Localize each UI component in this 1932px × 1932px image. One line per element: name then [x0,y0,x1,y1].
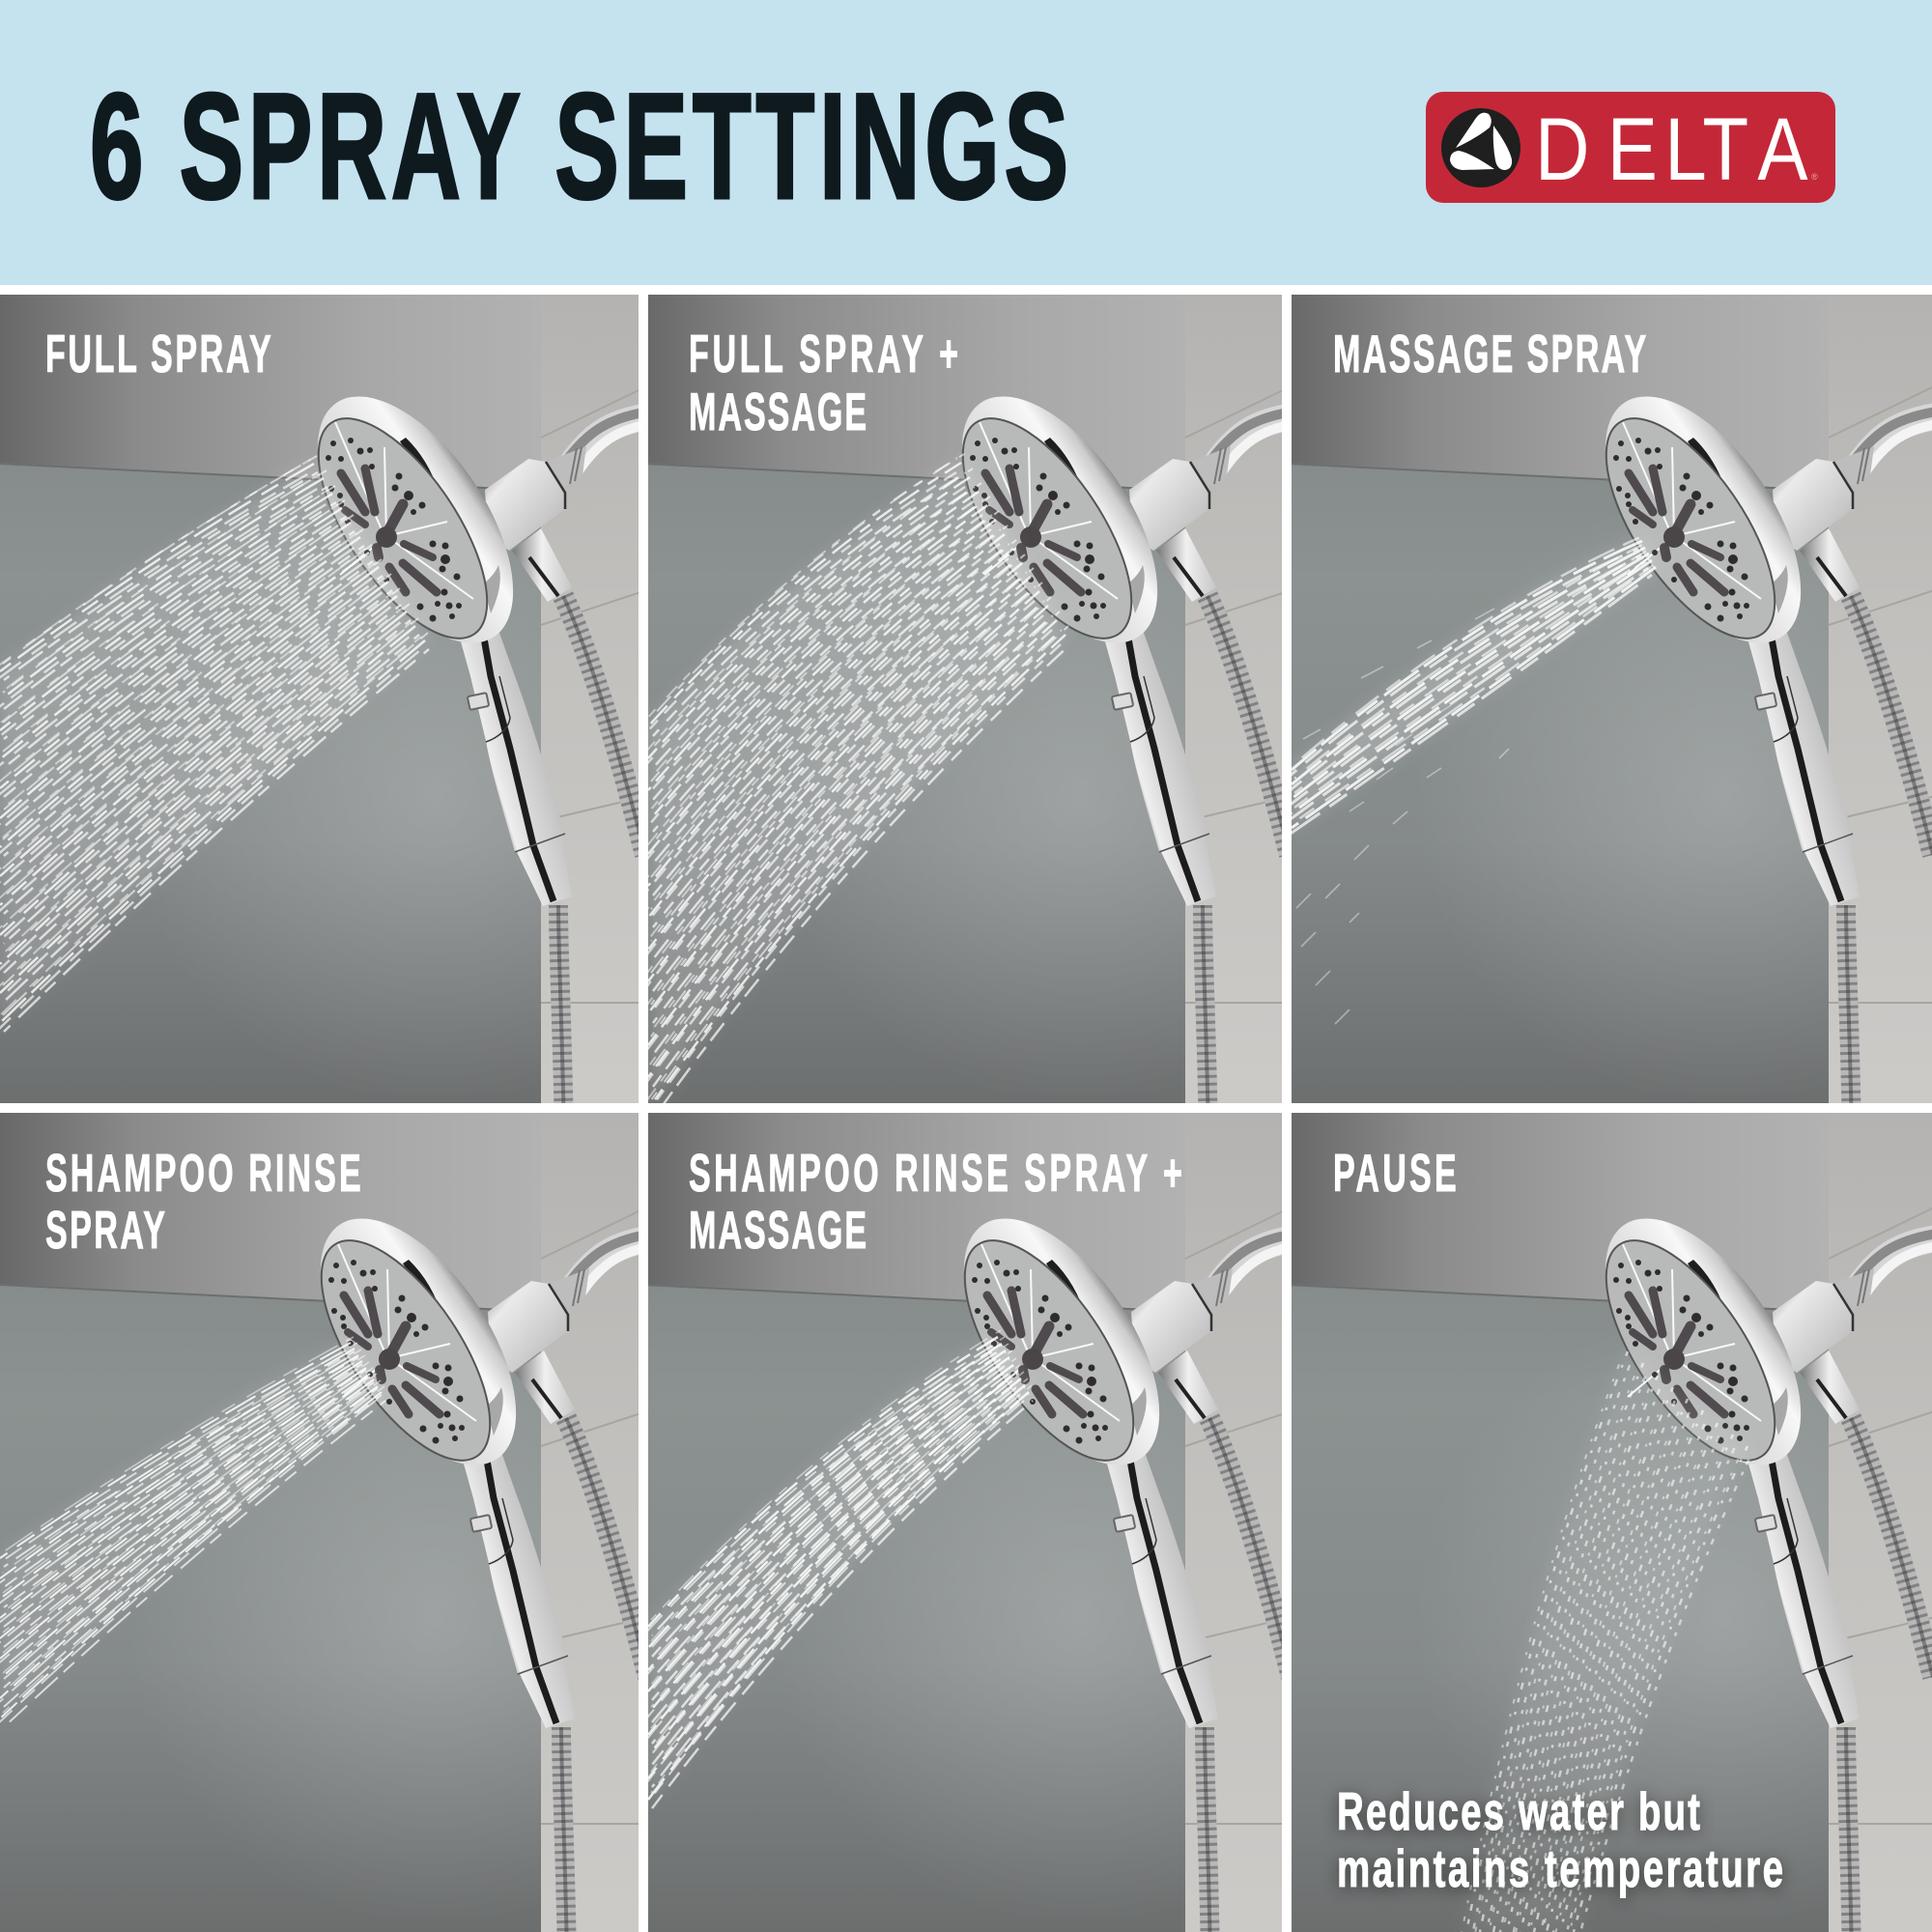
water spray [643,1330,1033,1808]
panel photo backdrop [1268,275,1932,1145]
panel: massage spray [1292,295,1932,1103]
water spray [0,456,429,1033]
label: PAUSE [1333,1144,1457,1203]
logo wordmark: DELTA [1535,100,1808,199]
panel: pause [1292,1113,1932,1932]
label line two: SPRAY [45,1201,165,1260]
water spray [0,1337,385,1727]
panel: shampoo rinse spray + massage [648,1113,1282,1932]
panel: full spray [0,295,639,1103]
label line two: MASSAGE [689,383,867,441]
panel: full spray + massage [648,295,1282,1103]
label: SHAMPOO RINSE SPRAY + [689,1144,1182,1203]
note line one: Reduces water but [1337,1782,1700,1842]
icon: Delta triangle mark [1441,108,1520,187]
shower head [279,364,649,1135]
note [1337,1782,1783,1899]
registered mark: ® [1811,172,1818,182]
note line two: maintains temperature [1337,1839,1783,1899]
logo: Delta [1426,92,1835,203]
label: FULL SPRAY [45,325,271,384]
title: 6 SPRAY SETTINGS [90,61,1068,230]
water droplets [1461,1351,1753,1932]
panel photo backdrop [1268,1096,1932,1932]
water spray [643,454,1070,1119]
shower head [282,1186,652,1932]
panel: shampoo rinse spray [0,1113,639,1932]
label: MASSAGE SPRAY [1333,325,1646,384]
label line two: MASSAGE [689,1201,867,1260]
panel photo backdrop [625,275,1321,1145]
panel photo backdrop [0,1096,676,1932]
panel photo backdrop [625,1096,1321,1932]
shower head [925,1186,1295,1932]
shower head [1567,1186,1932,1932]
water spray [1288,535,1659,1024]
label: FULL SPRAY + [689,325,958,384]
label: SHAMPOO RINSE [45,1144,361,1203]
panel photo backdrop [0,275,676,1145]
shower head [1567,364,1932,1135]
header band [0,0,1932,285]
shower head [923,364,1293,1135]
